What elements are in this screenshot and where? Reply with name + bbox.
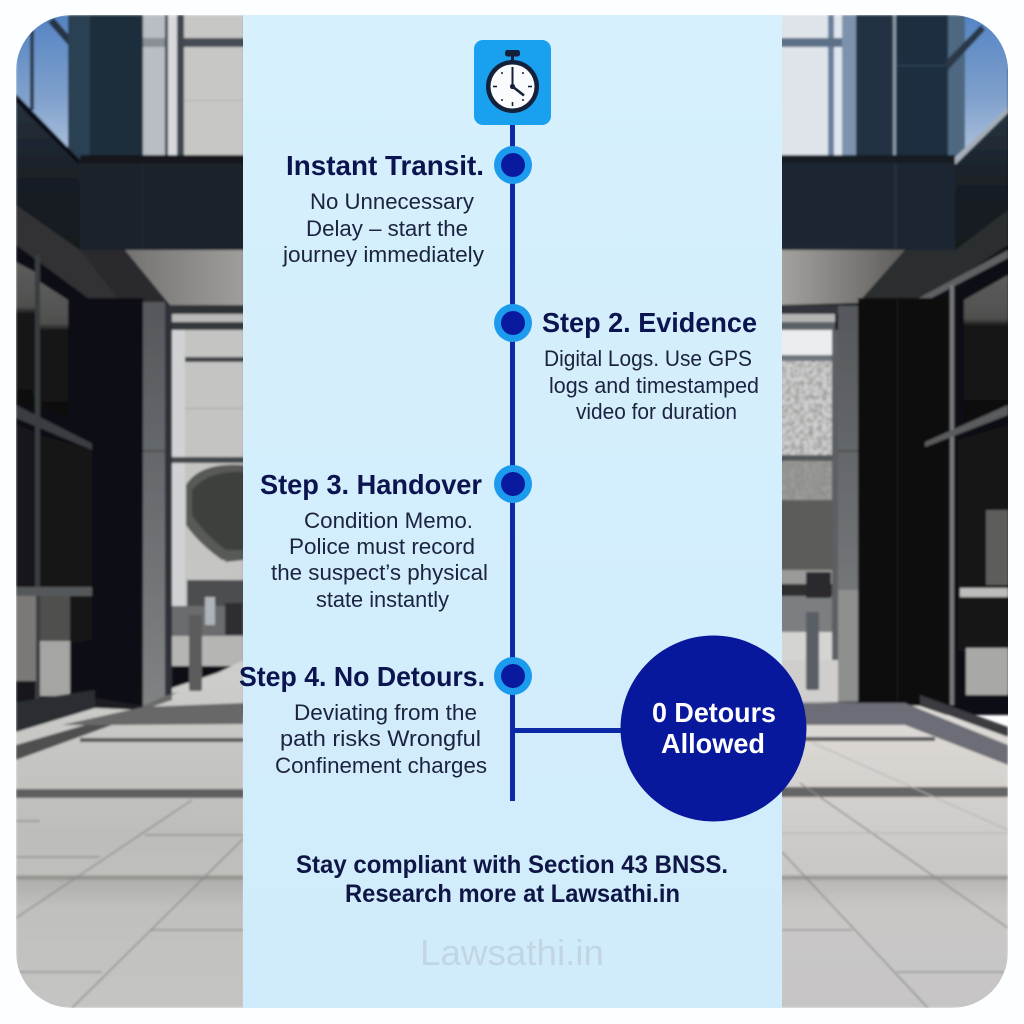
- callout: 0 Detours Allowed: Allowed: [661, 728, 765, 759]
- step 3: Handover: Step 3. Handover: [260, 469, 482, 500]
- timeline vertical line: [510, 120, 515, 801]
- watermark: Lawsathi.in: [420, 932, 604, 973]
- bollard: [806, 612, 819, 690]
- photo: right building side: [780, 15, 1010, 715]
- glass panes: [16, 262, 35, 410]
- step 4 node: [494, 657, 532, 695]
- step 4: No Detours: Step 4. No Detours.: [239, 661, 485, 692]
- step 2: Evidence: [542, 307, 759, 424]
- photo: left floor: [16, 615, 244, 1008]
- step 1: Instant Transit: journey immediately: [282, 242, 485, 267]
- step 3: Handover: state instantly: [316, 587, 450, 612]
- dark column: [92, 298, 143, 708]
- step 1: Instant Transit: Delay – start the: [306, 216, 468, 241]
- step 3: Handover: Police must record: [289, 534, 475, 559]
- photo: right floor: [780, 612, 1008, 1008]
- step 2 node: [494, 304, 532, 342]
- footer call to action: Research more at Lawsathi.in: [345, 880, 680, 908]
- bollard: [189, 615, 202, 691]
- step 2: Evidence: Step 2. Evidence: [542, 307, 757, 338]
- step 3: Handover: [260, 469, 488, 612]
- step 2: Evidence: Digital Logs. Use GPS: [544, 346, 752, 371]
- step 4: No Detours: Confinement charges: [275, 753, 487, 778]
- step 1: Instant Transit: Instant Transit.: [286, 150, 484, 181]
- step 1: Instant Transit: [282, 150, 485, 267]
- window with tree: [184, 328, 243, 608]
- callout: 0 Detours Allowed: 0 Detours: [652, 697, 776, 728]
- step 4: No Detours: Deviating from the: [294, 700, 477, 725]
- step 3: Handover: the suspect’s physical: [271, 560, 488, 585]
- tree in window: [780, 361, 832, 664]
- photo: left building side: [16, 15, 246, 715]
- step 1: Instant Transit: No Unnecessary: [310, 189, 475, 214]
- step 2: Evidence: logs and timestamped: [549, 373, 759, 398]
- footer call to action: [296, 851, 728, 908]
- step 3: Handover: Condition Memo.: [304, 508, 473, 533]
- connector line to callout: [512, 728, 624, 733]
- step 1 node: [494, 146, 532, 184]
- central light blue panel: [243, 15, 782, 1008]
- step 4: No Detours: [239, 661, 487, 778]
- callout: 0 Detours Allowed: [620, 636, 806, 822]
- footer call to action: Stay compliant with Section 43 BNSS.: [296, 851, 728, 879]
- icon: stopwatch: [474, 40, 551, 125]
- step 3 node: [494, 465, 532, 503]
- step 4: No Detours: path risks Wrongful: [280, 726, 481, 751]
- step 2: Evidence: video for duration: [576, 399, 737, 424]
